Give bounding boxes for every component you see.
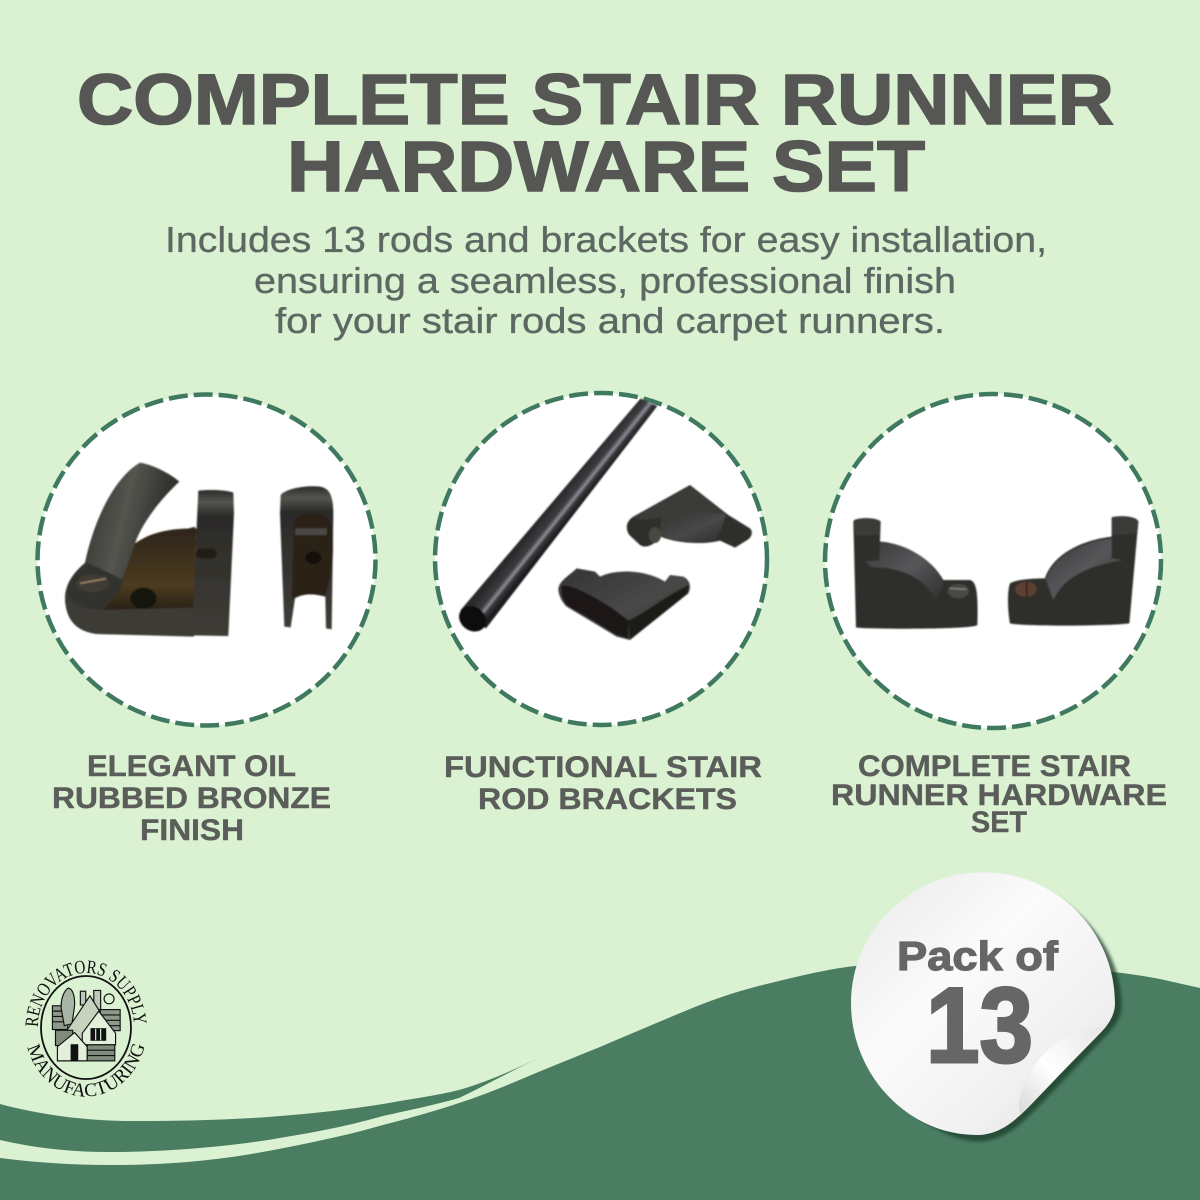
label: complete stair runner hardware set: COMPLETE STAIR [858, 750, 1131, 783]
subtitle text block: Includes 13 rods and brackets for easy installation, [165, 219, 1047, 260]
badge text: Pack of [897, 933, 1058, 979]
label: elegant oil rubbed bronze finish: RUBBED BRONZE [52, 782, 331, 815]
badge text [897, 933, 1058, 1085]
label: functional stair rod brackets: ROD BRACKETS [478, 783, 737, 816]
icon: upper bracket [627, 485, 752, 548]
icon: bracket end view [280, 486, 333, 629]
title: HARDWARE SET [287, 128, 925, 207]
logo: Renovators Supply Manufacturing: MANUFACTURING [27, 1043, 144, 1097]
label: elegant oil rubbed bronze finish: FINISH [140, 814, 244, 847]
footer wave [0, 963, 1200, 1200]
label: complete stair runner hardware set: RUNNER HARDWARE [831, 779, 1167, 812]
label: complete stair runner hardware set: SET [971, 806, 1027, 839]
title [77, 61, 1114, 207]
icon: open bracket with strap [65, 463, 234, 637]
label: elegant oil rubbed bronze finish: ELEGANT OIL [87, 750, 296, 783]
label: elegant oil rubbed bronze finish [52, 750, 331, 847]
label: complete stair runner hardware set [831, 750, 1167, 839]
swoosh accent [0, 1057, 541, 1152]
peeled corner [1019, 1028, 1103, 1115]
icon: left bracket [853, 518, 978, 629]
title: COMPLETE STAIR RUNNER [77, 61, 1114, 140]
logo: Renovators Supply Manufacturing [25, 960, 146, 1097]
logo: Renovators Supply Manufacturing: RENOVATORS SUPPLY [25, 960, 146, 1027]
icon: right bracket [1008, 516, 1138, 626]
panel: stair rod and brackets photo [435, 393, 767, 725]
icon: lower bracket [558, 568, 690, 640]
subtitle text block [165, 219, 1047, 341]
icon: house [52, 988, 120, 1061]
subtitle text block: for your stair rods and carpet runners. [275, 300, 945, 341]
label: functional stair rod brackets [444, 751, 762, 816]
panel: oil rubbed bronze finish photo [38, 394, 376, 726]
subtitle text block: ensuring a seamless, professional finish [254, 260, 956, 301]
sticker shadow [863, 877, 1122, 1142]
icon: stair rod [454, 398, 657, 637]
sticker badge: pack of 13 [851, 872, 1122, 1142]
panel: complete hardware set photo [825, 394, 1161, 728]
badge text: 13 [926, 965, 1033, 1085]
sticker body [851, 872, 1115, 1135]
label: functional stair rod brackets: FUNCTIONAL STAIR [444, 751, 762, 784]
